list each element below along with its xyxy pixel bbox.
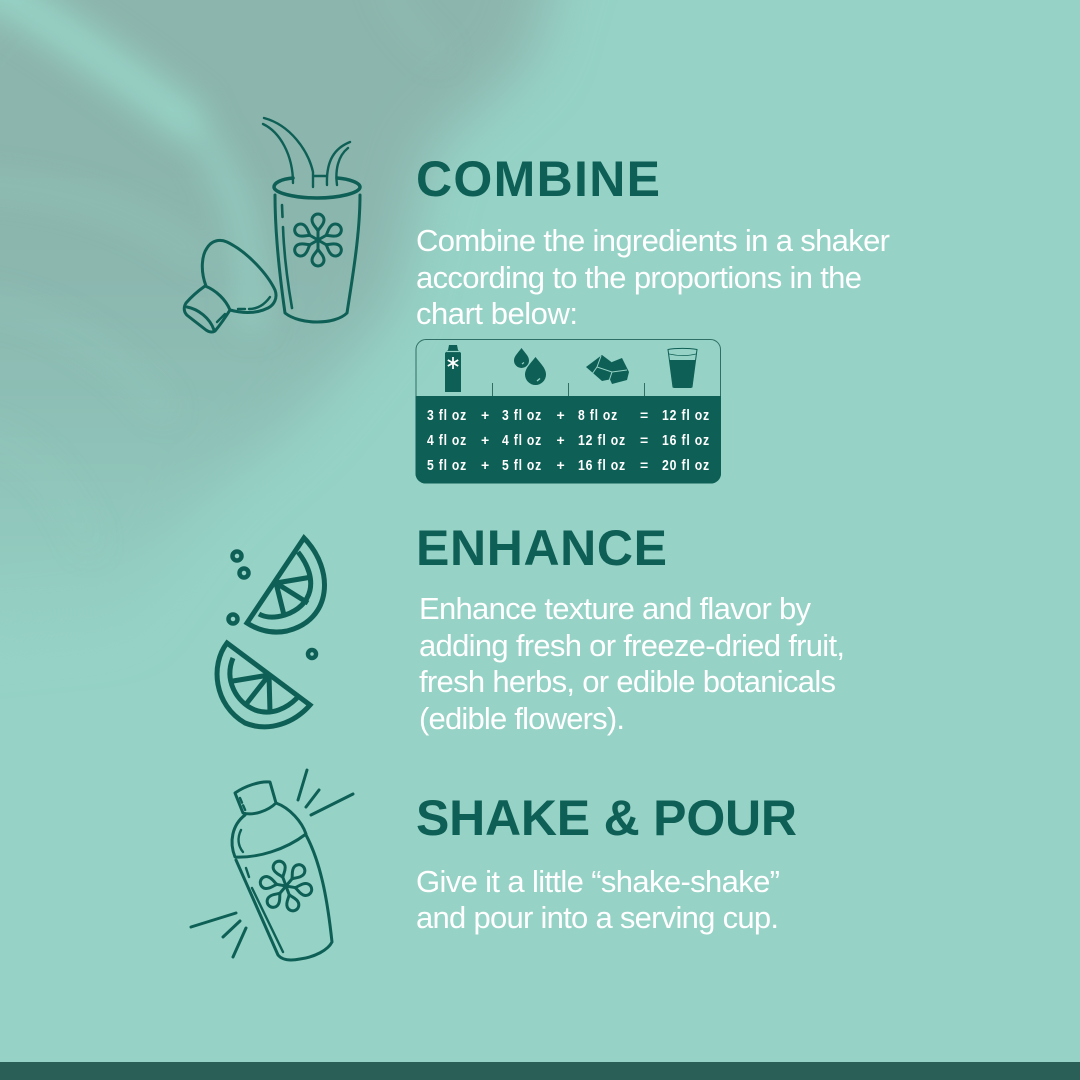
table values: + [556,407,566,423]
icon: ice cubes [586,355,629,384]
asterisk logo on shaker [253,853,319,919]
icon: serving glass [668,348,697,388]
table values: 16 fl oz [662,432,710,449]
text: enhance instructions [419,591,845,736]
table values: 20 fl oz [662,457,710,474]
table values: 3 fl oz [427,407,467,424]
icon: shaker cup with cap [184,118,360,332]
seeds [228,552,316,658]
text: shake and pour instructions [416,864,780,935]
table values: = [640,407,649,423]
motion lines [191,770,353,957]
chart frame [416,340,720,483]
icon: citrus slices [217,538,324,727]
text: enhance instructions: adding fresh or freeze-dried fruit, [419,628,845,663]
text: shake and pour instructions: Give it a little “shake-shake” [416,864,780,899]
asterisk logo on cup [292,214,344,266]
heading: shake and pour: SHAKE & POUR [416,790,797,846]
table values: 12 fl oz [662,407,710,424]
icon: cocktail shaker [191,770,353,960]
shaker body [232,782,332,960]
icon: concentrate bottle [445,345,461,392]
text: combine instructions: Combine the ingredients in a shaker [416,223,890,258]
column ticks [492,383,644,396]
table values: 4 fl oz [427,432,467,449]
table values: 5 fl oz [427,457,467,474]
text: combine instructions: according to the proportions in the [416,260,862,295]
icon: water drops [514,348,546,385]
text: shake and pour instructions: and pour into a serving cup. [416,900,779,935]
proportions chart [415,340,721,484]
heading: combine: COMBINE [416,151,660,207]
text: combine instructions [416,223,890,331]
table values: + [556,457,566,473]
table values: 16 fl oz [578,457,626,474]
shaker cap [184,240,276,332]
text: enhance instructions: (edible flowers). [419,701,625,736]
table values [427,407,710,474]
chart dark table area [415,396,721,484]
bottom citrus slice [217,643,310,727]
table values: 8 fl oz [578,407,618,424]
table values: = [640,457,649,473]
text: enhance instructions: fresh herbs, or edible botanicals [419,664,836,699]
table values: + [556,432,566,448]
cup [263,118,360,322]
table values: + [481,432,490,448]
palm leaf shadow [0,0,570,640]
table values: 12 fl oz [578,432,626,449]
text: enhance instructions: Enhance texture and flavor by [419,591,812,626]
table values: = [640,432,649,448]
heading: enhance: ENHANCE [416,520,667,576]
table values: 5 fl oz [502,457,542,474]
bottom bar [0,1062,1080,1080]
table values: 3 fl oz [502,407,542,424]
table values: + [481,457,490,473]
table values: + [481,407,490,423]
text: combine instructions: chart below: [416,296,578,331]
table values: 4 fl oz [502,432,542,449]
top citrus slice [247,538,324,632]
